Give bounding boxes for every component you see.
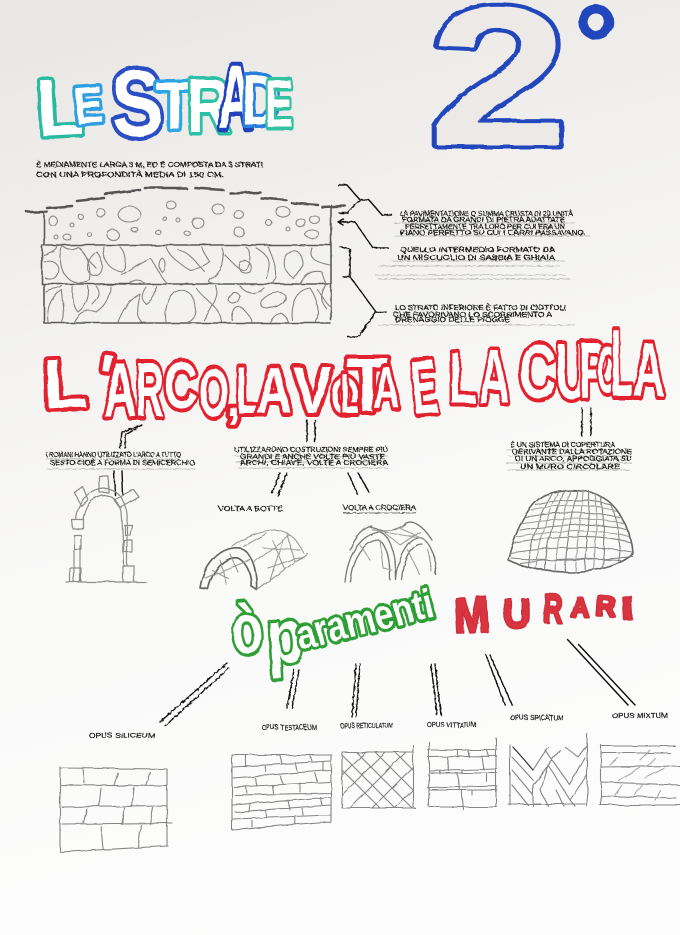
vault caption	[233, 445, 388, 468]
title: L'arco, la volta e la cupola: '	[89, 339, 120, 415]
title: L'arco, la volta e la cupola: U	[556, 329, 588, 415]
title: L'arco, la volta e la cupola: A	[373, 357, 400, 421]
road intro text: CON UNA PROFONDITÀ MEDIA DI 150 CM.	[36, 170, 224, 179]
road surface layer caption: LA PAVIMENTAZIONE O SUMMA CRUSTA DI 20 UNITÀ	[400, 209, 573, 218]
cross vault drawing	[345, 522, 436, 582]
connectors to the masonry types	[160, 640, 635, 726]
vault caption: UTILIZZARONO COSTRUZIONI SEMPRE PIÙ	[234, 445, 388, 454]
road surface layer caption	[394, 209, 590, 237]
panel: opus vittatum	[427, 720, 497, 810]
title: L'arco, la volta e la cupola: A	[479, 335, 510, 420]
title: L'arco, la volta e la cupola: O	[331, 366, 359, 426]
dome caption: È UN SISTEMA DI COPERTURA	[510, 440, 615, 449]
dome caption: UN MURO CIRCOLARE	[520, 462, 620, 471]
title: L'arco, la volta e la cupola: V	[293, 355, 332, 428]
title: L'arco, la volta e la cupola: L	[341, 364, 359, 426]
label: OPUS TESTACEUM	[262, 723, 317, 732]
title: L'arco, la volta e la cupola: R	[136, 348, 163, 432]
road lower layer caption: LO STRATO INFERIORE È FATTO DI CIOTTOLI	[395, 303, 566, 312]
title: L'arco, la volta e la cupola: A	[633, 329, 665, 413]
title: murari: I	[620, 589, 634, 626]
title: murari: M	[453, 586, 490, 644]
title: Le strade: A	[218, 47, 254, 148]
title: i paramenti	[229, 581, 438, 680]
title: murari: A	[571, 592, 589, 623]
title: i paramenti: ò	[229, 589, 266, 670]
title: i paramenti: p	[264, 593, 306, 680]
road surface layer caption: FORMATA DA GRANDI DI PIETRA ADATTATE	[402, 215, 565, 224]
herringbone drawing	[508, 733, 587, 806]
arch drawing	[66, 471, 147, 582]
barrel vault drawing	[200, 530, 307, 590]
title: L'arco, la volta e la cupola: T	[346, 343, 389, 428]
title: Le strade	[34, 47, 293, 158]
label: OPUS MIXTUM	[612, 711, 668, 720]
title: L'arco, la volta e la cupola: C	[164, 349, 197, 423]
road lower layer caption	[378, 303, 575, 325]
title: i paramenti: aramenti	[291, 581, 438, 660]
title: L'arco, la volta e la cupola: C	[519, 329, 556, 414]
vault caption: ARCHI, CHIAVE, VOLTE A CROCIERA	[240, 458, 388, 467]
title: Le strade: R	[187, 64, 231, 149]
title: L'arco, la volta e la cupola: O	[597, 333, 620, 407]
road middle layer caption	[375, 245, 570, 279]
masonry drawing	[60, 767, 172, 852]
title: L'arco, la volta e la cupola: ,	[226, 365, 242, 428]
diamond mesh drawing	[342, 745, 415, 808]
title: murari: U	[503, 592, 530, 636]
label: OPUS RETICULATUM	[340, 721, 393, 730]
panel: opus reticulatum	[340, 721, 415, 808]
title: L'arco, la volta e la cupola: L	[42, 343, 88, 423]
lower cobble layer	[46, 284, 330, 322]
title: L'arco, la volta e la cupola: L	[236, 354, 260, 428]
arch caption	[46, 450, 195, 469]
road surface slabs	[27, 188, 345, 212]
road cross-section drawing	[27, 188, 345, 323]
title: Le strade: L	[34, 61, 85, 153]
vault connectors	[272, 473, 369, 496]
title: L'arco, la volta e la cupola: O	[199, 354, 229, 431]
title: L'arco, la volta e la cupola: L	[611, 310, 633, 417]
middle gravel layer	[44, 246, 330, 284]
connectors from the title to the captions	[120, 408, 591, 448]
panel: opus spicatum	[508, 713, 587, 806]
road surface layer caption: PIANO PERFETTO SU CUI I CARRI PASSAVANO.	[400, 228, 586, 237]
dome caption	[506, 440, 632, 471]
panel: opus mixtum	[600, 711, 680, 805]
label: OPUS VITTATUM	[427, 720, 476, 729]
stone courses drawing	[428, 738, 497, 810]
dome caption: DI UN ARCO, APPOGGIATA SU	[515, 454, 632, 463]
road middle layer caption: UN MISCUGLIO DI SABBIA E GHIAIA	[397, 253, 555, 262]
road bracket: surface layer	[338, 185, 392, 215]
title: L'arco, la volta e la cupola: P	[579, 326, 607, 415]
title: L'arco, la volta e la cupola: A	[256, 354, 292, 428]
panel: opus testaceum	[232, 723, 332, 830]
title: murari: R	[543, 587, 563, 632]
label: OPUS SILICEUM	[89, 731, 155, 740]
road middle layer caption: QUELLO INTERMEDIO FORMATO DA	[400, 245, 555, 254]
dome caption: DERIVANTE DALLA ROTAZIONE	[512, 447, 632, 456]
title: Le strade: T	[156, 67, 193, 144]
label: volta a crociera: VOLTA A CROCIERA	[343, 503, 416, 512]
title: L'arco, la volta e la cupola: E	[408, 344, 441, 430]
road lower layer caption: DRENAGGIO DELLE PIOGGE	[395, 315, 510, 324]
road layer frames	[42, 205, 331, 323]
road bracket: lower layer	[340, 247, 386, 337]
title: L'arco, la volta e la cupola: L	[449, 338, 476, 419]
title: Le strade: E	[72, 76, 105, 136]
panel: opus siliceum	[60, 731, 172, 852]
pebbles layer	[49, 201, 320, 240]
brick wall drawing	[232, 755, 332, 830]
title: Le strade: S	[109, 50, 165, 158]
label: OPUS SPICATUM	[510, 713, 563, 722]
road surface layer caption: PERFETTAMENTE TRA LORO PER CUI ERA UN	[405, 222, 565, 231]
title: murari	[453, 586, 634, 644]
title: L'arco, la volta e la cupola	[42, 310, 665, 433]
road intro text	[36, 160, 263, 179]
road intro text: È MEDIAMENTE LARGA 3 M, ED È COMPOSTA DA 3 STRATI	[36, 160, 263, 169]
title: Le strade: E	[265, 66, 293, 141]
arch caption: SESTO CIOÈ A FORMA DI SEMICERCHIO	[50, 458, 195, 467]
dome drawing	[508, 490, 633, 572]
road lower layer caption: CHE FAVORIVANO LO SCORRIMENTO A	[393, 310, 552, 319]
label: volta a botte: VOLTA A BOTTE	[218, 504, 283, 513]
title: Le strade: D	[242, 61, 279, 141]
vault caption: GRANDI E ANCHE VOLTE PIÙ VASTE	[240, 452, 385, 461]
title: murari: R	[595, 590, 617, 622]
arch caption: I ROMANI HANNO UTILIZZATO L'ARCO A TUTTO	[46, 450, 181, 459]
courses drawing	[600, 745, 680, 805]
road bracket: middle layer	[338, 219, 388, 248]
title: L'arco, la volta e la cupola: A	[103, 349, 137, 433]
